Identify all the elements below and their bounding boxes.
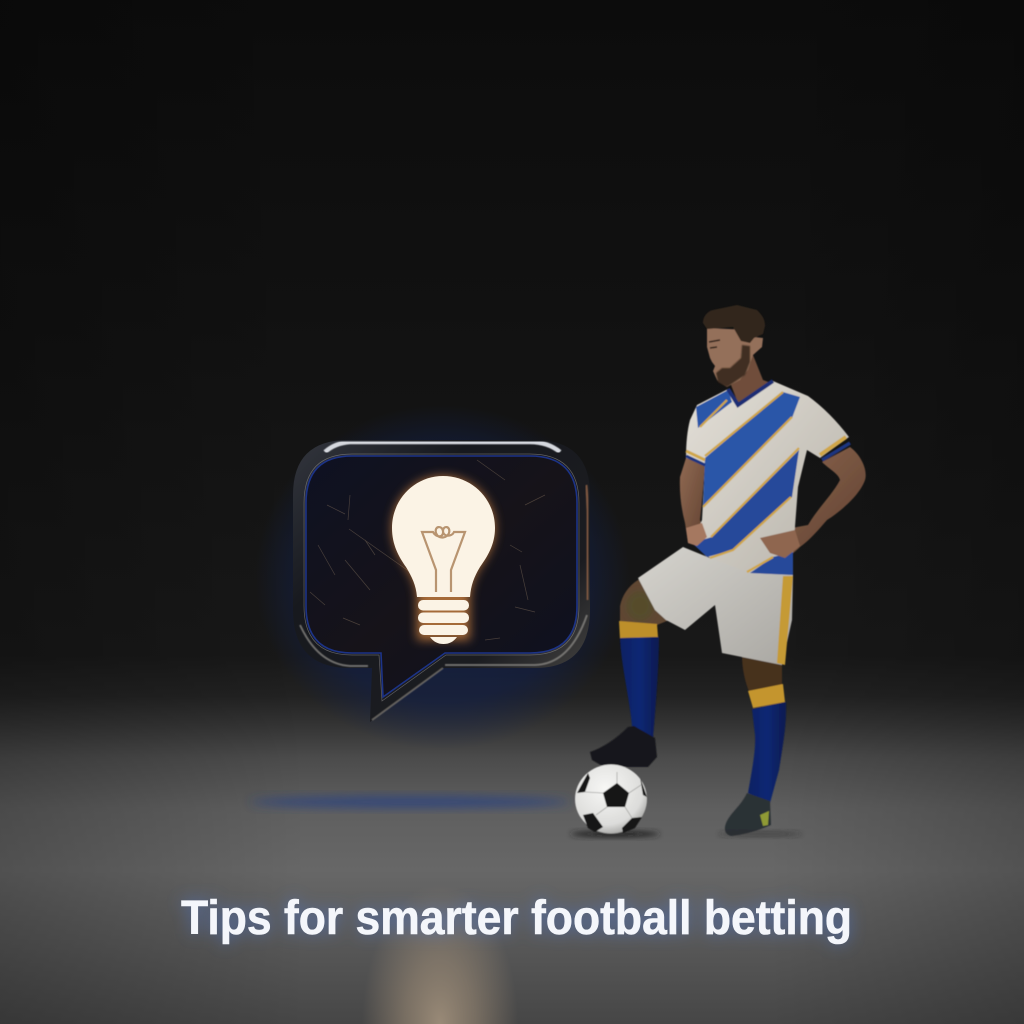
knee hair texture xyxy=(626,591,654,621)
face xyxy=(707,328,763,387)
icon: lightbulb xyxy=(392,476,495,644)
left cuff gold xyxy=(686,451,705,460)
raised leg skin xyxy=(620,576,690,625)
football xyxy=(575,764,647,834)
bubble interior xyxy=(306,456,577,697)
raised sock band xyxy=(619,621,658,639)
left cuff blue xyxy=(686,456,705,465)
upper left blue panel xyxy=(696,390,732,428)
beard xyxy=(716,345,750,387)
right standing leg skin xyxy=(742,655,782,694)
right boot shadow xyxy=(718,831,802,837)
eye and brow xyxy=(709,340,720,348)
inner fine edge xyxy=(304,454,579,701)
left arm xyxy=(680,458,707,546)
collar xyxy=(728,381,773,405)
chrome bezel xyxy=(293,440,590,722)
left hand xyxy=(686,523,707,546)
right cuff gold xyxy=(820,437,846,455)
ball contact shadow xyxy=(570,830,660,838)
blue floor reflection xyxy=(250,796,570,808)
blue halo behind bubble xyxy=(255,405,630,750)
hem blue panel xyxy=(750,552,793,575)
jersey xyxy=(686,381,850,575)
hair xyxy=(703,305,765,343)
title: Tips for smarter football betting xyxy=(181,892,852,945)
right hand fingers xyxy=(760,530,800,558)
bulb warm glow xyxy=(392,476,495,640)
panel: speech bubble with lightbulb xyxy=(293,440,590,722)
right arm xyxy=(758,447,866,558)
bezel right reflection xyxy=(586,485,588,600)
main blue stripe xyxy=(703,392,800,507)
jersey body and sleeves xyxy=(686,381,849,575)
shorts gold stripe xyxy=(777,576,793,665)
shorts xyxy=(638,547,793,665)
title glow: Tips for smarter football betting xyxy=(181,892,852,945)
bezel top highlight xyxy=(325,442,560,452)
scratches on glass xyxy=(310,460,545,640)
right sock band xyxy=(748,684,785,708)
right boot xyxy=(725,793,771,836)
football player xyxy=(570,305,866,838)
boot accent xyxy=(760,811,769,826)
bezel lower rim light xyxy=(300,615,587,666)
right cuff blue xyxy=(822,443,850,460)
right sock xyxy=(748,702,786,803)
lower blue stripe xyxy=(692,450,799,557)
raised boot xyxy=(590,726,657,767)
neck xyxy=(731,355,776,408)
gold pinstripes xyxy=(700,392,799,572)
bezel tail rim xyxy=(372,668,443,720)
raised sock xyxy=(620,637,659,738)
